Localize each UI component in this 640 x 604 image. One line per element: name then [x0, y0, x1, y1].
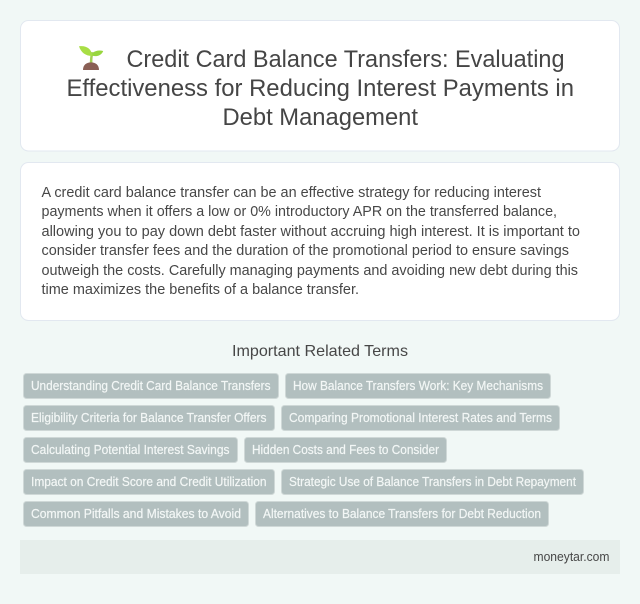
tag — [286, 374, 550, 398]
tag: Eligibility Criteria for Balance Transfer Offers — [31, 411, 266, 425]
title: Effectiveness for Reducing Interest Payments in — [66, 75, 574, 102]
text block: description — [42, 184, 580, 298]
tag: Calculating Potential Interest Savings — [31, 443, 230, 457]
panel: title card — [20, 20, 620, 151]
panel: description — [20, 162, 620, 320]
tag — [24, 406, 274, 430]
tag: Comparing Promotional Interest Rates and Terms — [289, 411, 552, 425]
tag — [282, 470, 584, 494]
tag — [282, 406, 560, 430]
tag: Hidden Costs and Fees to Consider — [252, 443, 440, 457]
tag list: related terms — [24, 374, 584, 526]
title: Credit Card Balance Transfers: Evaluating — [126, 46, 564, 73]
text block: description: A credit card balance transfer can be an effective strategy for reducing interest — [42, 184, 542, 201]
heading: related terms: Important Related Terms — [232, 343, 408, 360]
tag: How Balance Transfers Work: Key Mechanisms — [293, 379, 543, 393]
text block: description: time maximizes the benefits of a balance transfer. — [42, 281, 359, 298]
tag: Alternatives to Balance Transfers for Debt Reduction — [263, 507, 541, 521]
text block: description: outweigh the costs. Carefully managing payments and avoiding new debt during this — [42, 262, 578, 279]
tag — [24, 470, 274, 494]
tag: Strategic Use of Balance Transfers in Debt Repayment — [289, 475, 576, 489]
tag — [24, 502, 248, 526]
footer — [20, 540, 620, 574]
tag: Impact on Credit Score and Credit Utilization — [31, 475, 266, 489]
tag — [256, 502, 548, 526]
text block: description: allowing you to pay down debt faster without accruing high interest. It is important to — [42, 223, 580, 240]
tag — [24, 374, 278, 398]
title: Debt Management — [222, 104, 418, 131]
tag: Understanding Credit Card Balance Transfers — [31, 379, 270, 393]
tag — [244, 438, 446, 462]
text block: description: consider transfer fees and the duration of the promotional period to ensure savings — [42, 242, 569, 259]
title — [66, 46, 574, 131]
tag: Common Pitfalls and Mistakes to Avoid — [31, 507, 241, 521]
icon: seedling — [79, 46, 103, 70]
tag — [24, 438, 238, 462]
text block: description: payments when it offers a low or 0% introductory APR on the transferred balance, — [42, 203, 557, 220]
footer: site name: moneytar.com — [534, 549, 610, 564]
